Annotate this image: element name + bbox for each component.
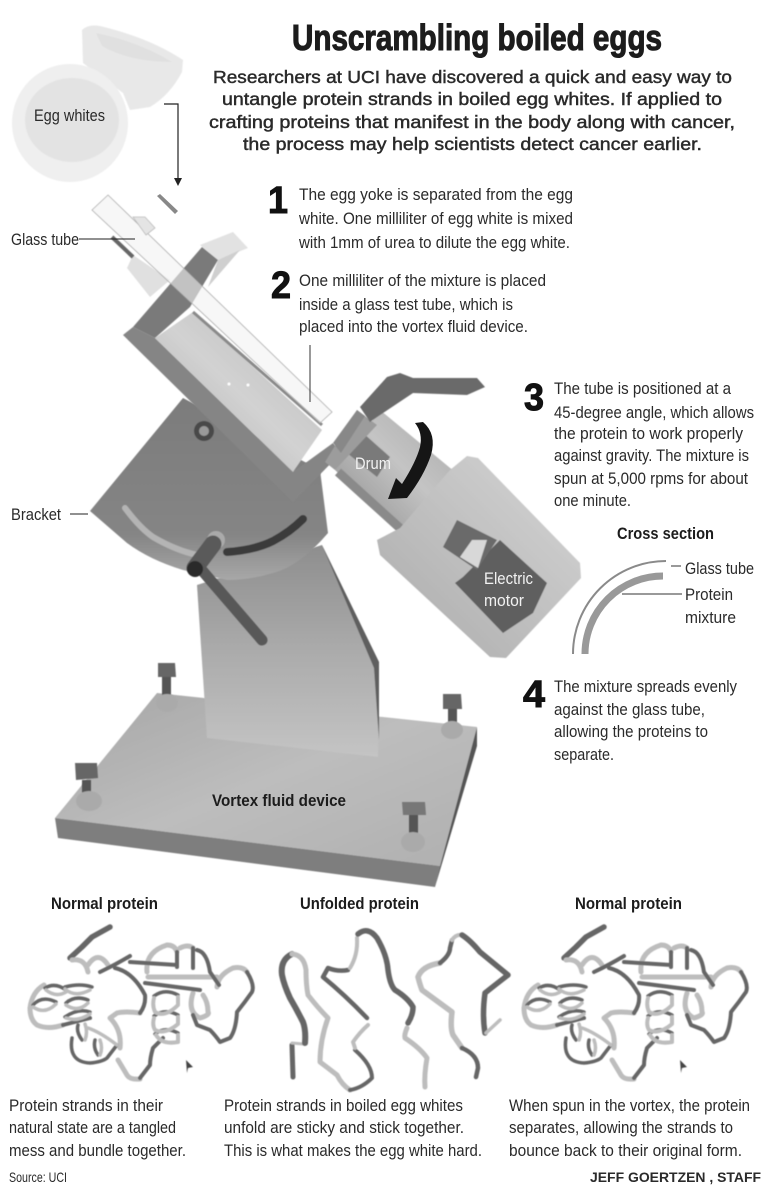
caption: refolded protein: bounce back to their original form. [509, 1142, 742, 1160]
caption: normal protein: Protein strands in their [9, 1097, 163, 1115]
credit: JEFF GOERTZEN , STAFF [590, 1169, 761, 1185]
step 3: one minute. [554, 492, 631, 510]
right helix coils [154, 992, 178, 1034]
step 1: with 1mm of urea to dilute the egg white. [298, 234, 570, 252]
caption: refolded protein: separates, allowing the strands to [509, 1119, 733, 1137]
label: egg whites: Egg whites [34, 107, 105, 125]
step 2 [271, 265, 546, 336]
intro text: crafting proteins that manifest in the body along with cancer, [209, 112, 735, 132]
panel: normal protein (right): Normal protein [575, 895, 682, 913]
step 3 [524, 377, 754, 510]
cross section diagram: Glass tube [685, 560, 754, 578]
cross section diagram: mixture [685, 609, 736, 627]
panel: normal protein (right) [524, 895, 747, 1079]
step 3: 3 [524, 377, 544, 419]
bolts [75, 663, 463, 852]
caption: refolded protein [509, 1097, 750, 1160]
panel: normal protein (left): Normal protein [51, 895, 158, 913]
caption: unfolded protein [224, 1097, 482, 1160]
step 3: spun at 5,000 rpms for about [554, 470, 748, 488]
label: electric motor [484, 570, 533, 610]
cross section diagram: Cross section [617, 525, 714, 543]
upper handle [360, 373, 485, 422]
intro text [209, 67, 735, 154]
drum [325, 410, 455, 533]
step 1: The egg yoke is separated from the egg [299, 186, 573, 204]
panel: normal protein (left) [30, 895, 253, 1079]
source: Source: UCI [9, 1169, 67, 1185]
step 2: inside a glass test tube, which is [299, 296, 513, 314]
step 4: 4 [523, 674, 545, 716]
left helix coils [33, 985, 117, 1063]
electric motor [377, 456, 581, 658]
bracket [90, 398, 328, 580]
caption: refolded protein: When spun in the vortex, the protein [509, 1097, 750, 1115]
column [197, 545, 379, 757]
label: bracket: Bracket [11, 506, 61, 524]
base plate [55, 693, 477, 887]
intro text: Researchers at UCI have discovered a quick and easy way to [213, 67, 732, 87]
title: Unscrambling boiled eggs [292, 17, 662, 58]
cross section diagram [573, 525, 754, 654]
icon: tube stopper [157, 194, 178, 214]
step 4: against the glass tube, [554, 701, 705, 719]
protein diagram: refolded [524, 927, 747, 1079]
step 3: against gravity. The mixture is [554, 447, 749, 465]
vortex fluid device [55, 195, 581, 887]
caption: normal protein: mess and bundle together. [9, 1142, 186, 1160]
step 1: 1 [268, 180, 288, 222]
panel: unfolded protein: Unfolded protein [300, 895, 419, 913]
caption: unfolded protein: Protein strands in boiled egg whites [224, 1097, 463, 1115]
protein diagram: unfolded strands [282, 931, 508, 1090]
label: electric motor: Electric [484, 570, 533, 588]
glass tube [92, 195, 332, 423]
panel: unfolded protein [282, 895, 508, 1090]
cross section diagram: Protein [685, 586, 733, 604]
step 1: white. One milliliter of egg white is mixed [298, 210, 573, 228]
caption: unfolded protein: unfold are sticky and stick together. [224, 1119, 464, 1137]
intro text: the process may help scientists detect cancer earlier. [243, 134, 702, 154]
intro text: untangle protein strands in boiled egg whites. If applied to [222, 89, 722, 109]
step 2: placed into the vortex fluid device. [299, 318, 528, 336]
step 4: The mixture spreads evenly [554, 678, 738, 696]
caption: normal protein: natural state are a tangled [9, 1119, 176, 1137]
step 4: allowing the proteins to [554, 723, 708, 741]
icon: egg whites [12, 26, 183, 182]
step 1 [268, 180, 573, 252]
label: drum: Drum [355, 455, 391, 473]
step 3: The tube is positioned at a [554, 380, 732, 398]
label: vortex fluid device: Vortex fluid device [212, 792, 346, 810]
step 2: 2 [271, 265, 291, 307]
arm and channel [123, 232, 341, 502]
arrow: egg to tube [164, 104, 182, 186]
leader: step 2 to tube [309, 345, 311, 402]
caption: normal protein [9, 1097, 186, 1160]
step 4: separate. [554, 746, 614, 764]
label: glass tube [11, 231, 135, 249]
label: glass tube: Glass tube [11, 231, 79, 249]
step 3: the protein to work properly [554, 425, 744, 443]
protein diagram: tangled [30, 927, 253, 1079]
caption: unfolded protein: This is what makes the egg white hard. [224, 1142, 482, 1160]
rotation arrow [388, 422, 433, 499]
lower handle [187, 531, 262, 640]
step 4 [523, 674, 738, 764]
step 2: One milliliter of the mixture is placed [299, 272, 546, 290]
label: electric motor: motor [484, 592, 524, 610]
